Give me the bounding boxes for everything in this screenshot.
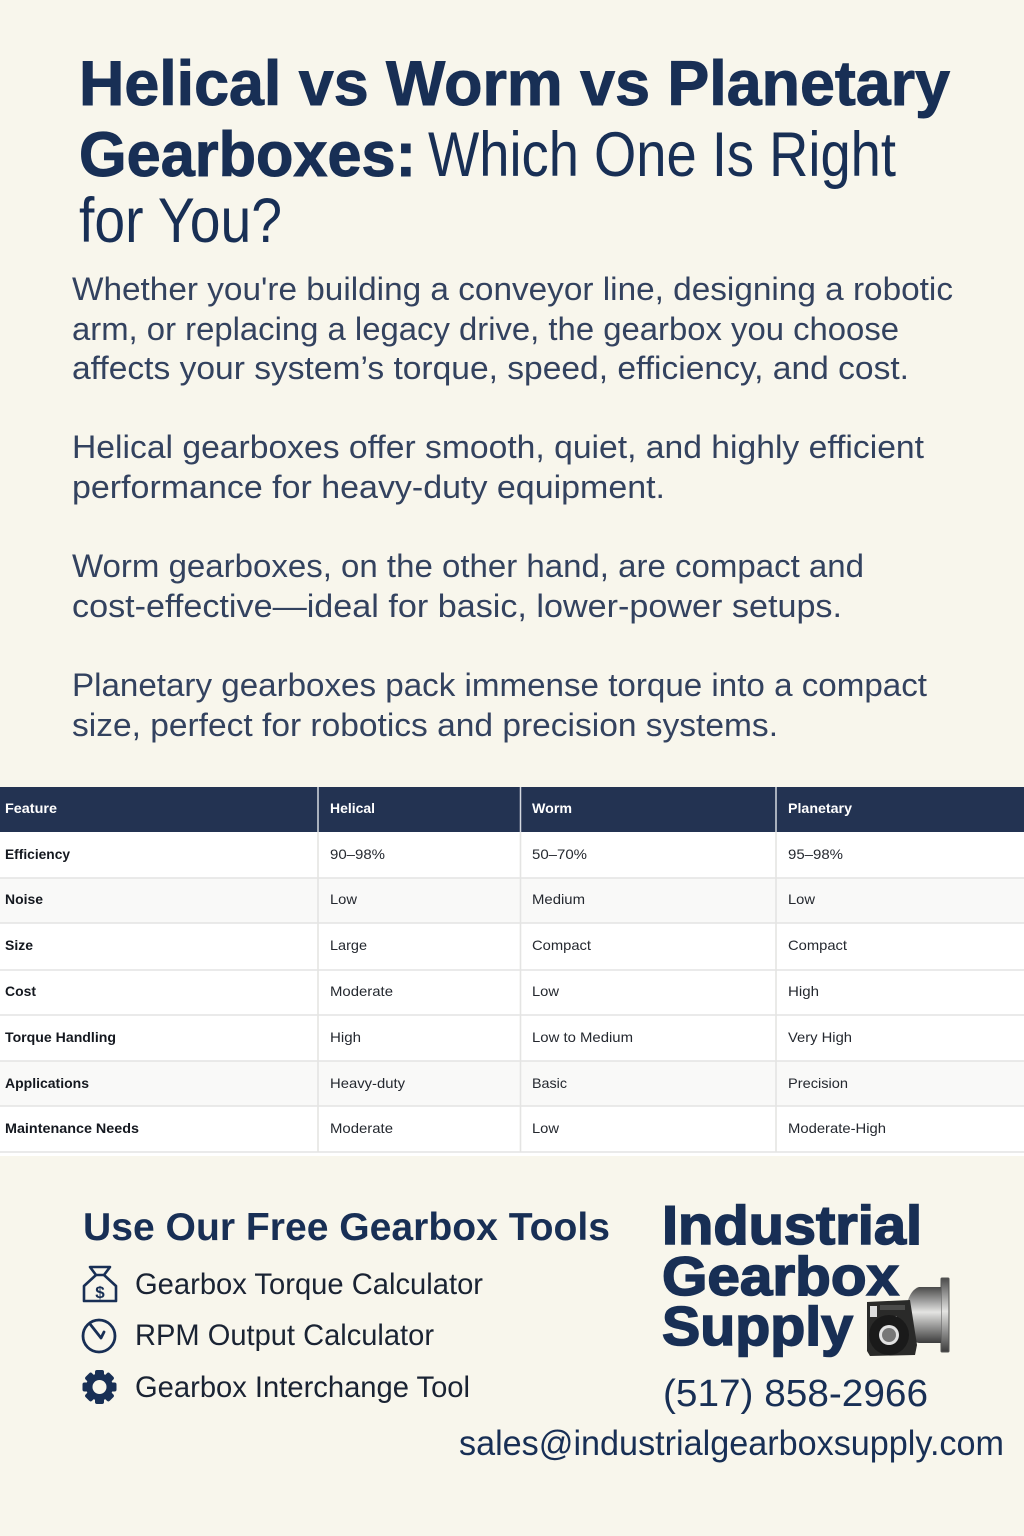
row: size: Large (330, 937, 367, 953)
row: size: Size (5, 937, 33, 953)
company logo wordmark: Gearbox (662, 1245, 899, 1307)
icon: money bag (84, 1267, 116, 1302)
icon: gear (82, 1370, 116, 1404)
row: cost: High (788, 983, 819, 999)
row: efficiency (5, 846, 843, 862)
row: noise: Low (330, 891, 358, 907)
phone number: (517) 858-2966 (663, 1373, 928, 1415)
table header (0, 787, 1024, 832)
row: torque handling: High (330, 1029, 361, 1045)
row: noise: Medium (532, 891, 585, 907)
row: applications: Basic (532, 1075, 567, 1091)
worm text block: Worm gearboxes, on the other hand, are compact and (72, 548, 864, 584)
intro text block: affects your system’s torque, speed, efficiency, and cost. (72, 350, 909, 386)
row: applications: Heavy-duty (330, 1075, 405, 1091)
row: maintenance needs: Moderate (330, 1120, 393, 1136)
row: size: Compact (788, 937, 847, 953)
row: cost: Moderate (330, 983, 393, 999)
worm text block: cost-effective—ideal for basic, lower-power setups. (72, 588, 842, 624)
row: maintenance needs: Moderate-High (788, 1120, 886, 1136)
planetary text block: Planetary gearboxes pack immense torque into a compact (72, 667, 927, 703)
intro text block: Whether you're building a conveyor line, designing a robotic (72, 271, 953, 307)
table header: Planetary (788, 800, 852, 816)
row: applications: Precision (788, 1075, 848, 1091)
row: noise (5, 891, 816, 907)
row: noise: Noise (5, 891, 43, 907)
tool: torque calculator: Gearbox Torque Calculator (135, 1268, 483, 1301)
table header: Worm (532, 800, 572, 816)
tool: rpm calculator: RPM Output Calculator (135, 1319, 434, 1352)
title: Which One Is Right (428, 120, 896, 190)
worm text block (72, 548, 864, 624)
intro text block (72, 271, 953, 386)
row: noise: Low (788, 891, 816, 907)
email address: sales@industrialgearboxsupply.com (459, 1424, 1004, 1463)
row: efficiency: 95–98% (788, 846, 843, 862)
row: cost: Cost (5, 983, 36, 999)
row: efficiency: Efficiency (5, 846, 70, 862)
intro text block: arm, or replacing a legacy drive, the gearbox you choose (72, 311, 899, 347)
helical text block: performance for heavy-duty equipment. (72, 469, 665, 505)
tool: interchange tool: Gearbox Interchange Tool (135, 1371, 470, 1404)
title: Gearboxes: (79, 120, 416, 190)
icon: worm gearbox illustration (867, 1278, 949, 1356)
title: for You? (79, 186, 282, 256)
row: applications: Applications (5, 1075, 89, 1091)
planetary text block (72, 667, 927, 743)
icon: money bag: $ (95, 1283, 105, 1302)
planetary text block: size, perfect for robotics and precision systems. (72, 707, 778, 743)
tools heading: Use Our Free Gearbox Tools (83, 1206, 610, 1249)
comparison table (0, 787, 1024, 1156)
row: maintenance needs: Low (532, 1120, 560, 1136)
company logo wordmark (662, 1194, 922, 1357)
row: efficiency: 50–70% (532, 846, 587, 862)
row: cost: Low (532, 983, 560, 999)
helical text block (72, 429, 924, 505)
row: torque handling (5, 1029, 852, 1045)
row: maintenance needs (5, 1120, 886, 1136)
row: size (5, 937, 847, 953)
row: torque handling: Very High (788, 1029, 852, 1045)
title: Helical vs Worm vs Planetary (79, 49, 950, 119)
row: efficiency: 90–98% (330, 846, 385, 862)
table header: Helical (330, 800, 375, 816)
company logo wordmark: Supply (662, 1295, 853, 1357)
row: size: Compact (532, 937, 591, 953)
row: maintenance needs: Maintenance Needs (5, 1120, 139, 1136)
table header: Feature (5, 800, 57, 816)
title (79, 49, 950, 256)
row: torque handling: Low to Medium (532, 1029, 633, 1045)
icon: clock dial (83, 1320, 115, 1352)
company logo wordmark: Industrial (662, 1194, 922, 1256)
row: torque handling: Torque Handling (5, 1029, 116, 1045)
row: applications (5, 1075, 848, 1091)
row: cost (5, 983, 819, 999)
helical text block: Helical gearboxes offer smooth, quiet, and highly efficient (72, 429, 924, 465)
